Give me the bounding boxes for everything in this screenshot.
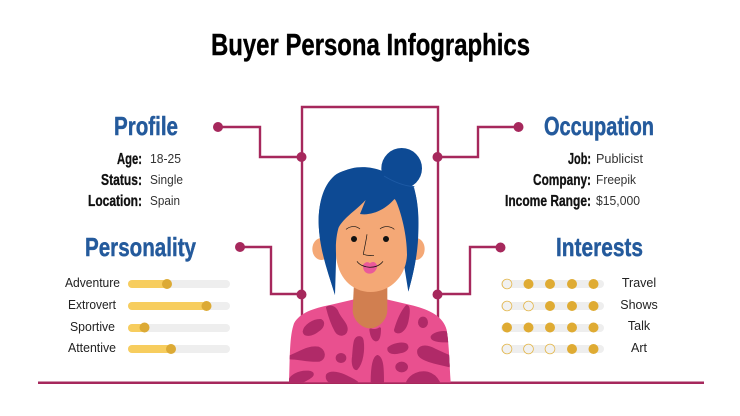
rating: travel: Travel [622, 276, 656, 290]
persona illustration [289, 148, 451, 382]
occupation rows: Company: [533, 172, 591, 189]
occupation rows: Publicist [596, 152, 644, 166]
slider: sportive [70, 320, 230, 334]
rating: talk [501, 319, 651, 333]
shirt [289, 299, 451, 382]
neck [353, 283, 387, 328]
profile rows: Status: [101, 172, 142, 189]
panel: interests [501, 232, 658, 355]
panel: occupation [505, 111, 654, 210]
rating: art: Art [631, 341, 648, 355]
personality heading: Personality [85, 232, 196, 262]
rating: art [501, 341, 648, 355]
face [336, 198, 407, 292]
connector lines [213, 107, 524, 383]
slider: extrovert [68, 298, 230, 312]
facial features [346, 227, 394, 274]
profile rows: Spain [150, 194, 180, 208]
slider: adventure: Adventure [65, 276, 120, 290]
occupation heading: Occupation [544, 111, 654, 141]
hair back [319, 167, 418, 295]
profile rows: Location: [88, 193, 142, 210]
occupation rows: $15,000 [596, 194, 640, 208]
occupation rows: Freepik [596, 173, 637, 187]
panel: personality [65, 232, 230, 355]
slider: attentive: Attentive [68, 341, 116, 355]
occupation rows: Income Range: [505, 193, 591, 210]
hair bun [381, 148, 422, 189]
profile rows: Single [150, 173, 183, 187]
profile rows: 18-25 [150, 152, 181, 166]
profile rows [88, 151, 183, 210]
panel: profile [88, 111, 183, 210]
occupation rows: Job: [568, 151, 591, 168]
rating: travel [501, 276, 656, 290]
rating: shows [501, 298, 658, 312]
occupation rows [505, 151, 644, 210]
title: Buyer Persona Infographics [211, 27, 530, 62]
slider: sportive: Sportive [70, 320, 115, 334]
slider: attentive [68, 341, 230, 355]
rating: shows: Shows [620, 298, 658, 312]
ears [312, 238, 425, 260]
rating: talk: Talk [628, 319, 651, 333]
profile heading: Profile [114, 111, 178, 141]
interests heading: Interests [556, 232, 643, 262]
fringe [319, 168, 418, 295]
baseline rule [38, 382, 704, 384]
slider: extrovert: Extrovert [68, 298, 117, 312]
profile rows: Age: [117, 151, 142, 168]
slider: adventure [65, 276, 230, 290]
